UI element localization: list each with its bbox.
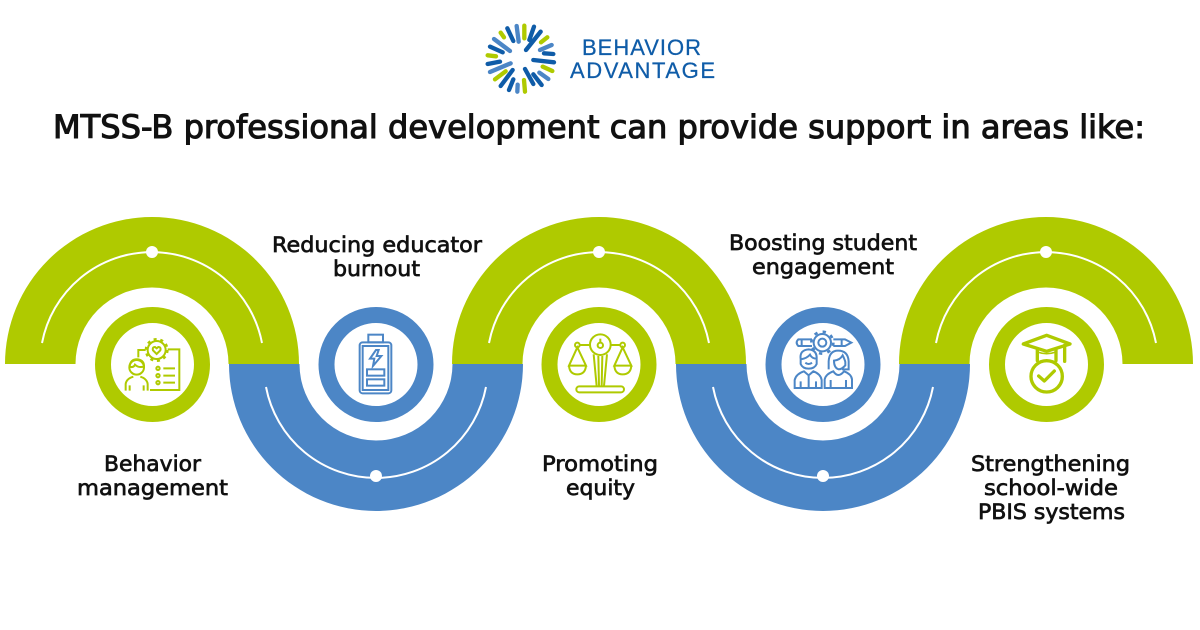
label: Boosting student engagement: engagement bbox=[752, 255, 894, 280]
title: MTSS-B professional development can provide support in areas like: bbox=[53, 108, 1145, 146]
wave of arches bbox=[5, 217, 1193, 511]
logo wordmark bbox=[570, 35, 715, 83]
icon: balance scale bbox=[569, 334, 631, 392]
label: Promoting equity bbox=[542, 452, 658, 501]
ring 5: green bbox=[997, 315, 1096, 414]
arch 3: green bbox=[452, 217, 746, 364]
label: Strengthening school-wide PBIS systems: Strengthening bbox=[971, 452, 1130, 477]
arch 4: blue bbox=[676, 364, 970, 511]
icon: battery bbox=[360, 335, 391, 393]
label: Promoting equity: equity bbox=[566, 476, 635, 501]
label: Strengthening school-wide PBIS systems: PBIS systems bbox=[978, 500, 1125, 525]
label: Boosting student engagement: Boosting student bbox=[729, 231, 917, 256]
label: Behavior management bbox=[77, 452, 228, 501]
ring 1: green bbox=[103, 315, 202, 414]
label: Behavior management: Behavior bbox=[104, 452, 201, 477]
label: Boosting student engagement bbox=[729, 231, 917, 280]
logo wordmark: ADVANTAGE bbox=[570, 58, 715, 83]
icon: person with checklist and gear bbox=[126, 339, 179, 391]
label: Strengthening school-wide PBIS systems bbox=[971, 452, 1130, 525]
logo: Behavior Advantage bbox=[488, 26, 715, 92]
label: Behavior management: management bbox=[77, 476, 228, 501]
logo icon: radial spokes bbox=[488, 26, 554, 92]
ring 3: green bbox=[550, 315, 648, 414]
arch 1: green bbox=[5, 217, 299, 364]
label: Promoting equity: Promoting bbox=[542, 452, 658, 477]
ring 2: blue bbox=[326, 315, 426, 414]
icon: graduation cap with check badge bbox=[1023, 335, 1070, 392]
ring 4: blue bbox=[774, 315, 872, 414]
icon: two students with gear and pencil bbox=[795, 332, 852, 388]
label: Reducing educator burnout: Reducing educator bbox=[272, 233, 482, 258]
logo wordmark: BEHAVIOR bbox=[582, 35, 701, 60]
label: Reducing educator burnout: burnout bbox=[333, 257, 420, 282]
arch 2: blue bbox=[229, 364, 523, 511]
label: Reducing educator burnout bbox=[272, 233, 482, 282]
label: Strengthening school-wide PBIS systems: school-wide bbox=[984, 476, 1118, 501]
arch 5: green bbox=[899, 217, 1193, 364]
